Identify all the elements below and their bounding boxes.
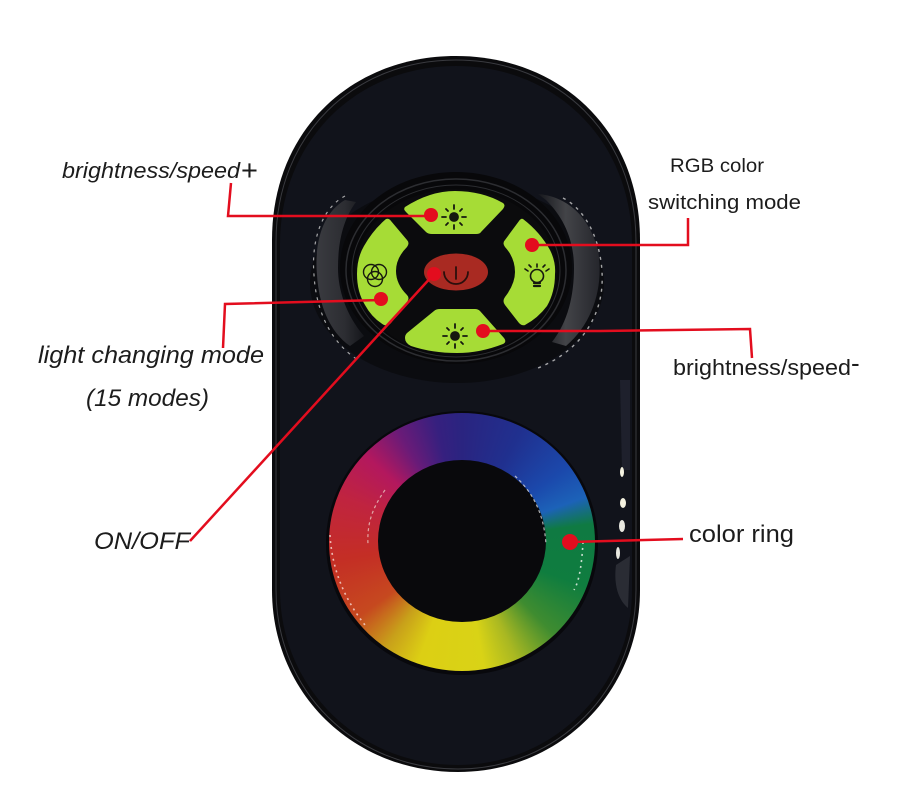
button bezel (310, 172, 604, 383)
callout: brightness/speed + (62, 155, 438, 222)
callout: brightness/speed +: brightness/speed (62, 158, 241, 183)
button: brightness up (404, 191, 504, 234)
callout: color ring (562, 521, 794, 550)
callout: ON/OFF (94, 267, 441, 555)
glare on right edge of body (615, 380, 630, 608)
button: brightness down (405, 309, 505, 353)
button: light changing mode (357, 219, 408, 325)
icon: three overlapping circles (364, 264, 386, 286)
icon: sun (442, 205, 466, 229)
color ring (326, 411, 598, 675)
icon: sun (443, 324, 467, 348)
callout: RGB color switching mode: RGB color (670, 156, 765, 177)
button: RGB color switching (504, 219, 555, 325)
callout: light changing mode (38, 292, 388, 412)
callout: brightness/speed +: + (241, 155, 258, 187)
callout: light changing mode: light changing mode (38, 342, 264, 369)
icon: light bulb (525, 264, 549, 286)
callout: ON/OFF: ON/OFF (94, 528, 191, 555)
callout: brightness/speed -: - (851, 348, 860, 378)
callout: light changing mode: (15 modes) (86, 385, 209, 412)
callout: brightness/speed - (476, 324, 860, 380)
callout: color ring: color ring (689, 521, 794, 548)
callout: brightness/speed -: brightness/speed (673, 355, 851, 380)
icon: power symbol (444, 267, 468, 284)
callout: RGB color switching mode (525, 156, 801, 252)
callout: RGB color switching mode: switching mode (648, 192, 801, 214)
remote control body (272, 56, 640, 772)
button: power (424, 254, 488, 290)
